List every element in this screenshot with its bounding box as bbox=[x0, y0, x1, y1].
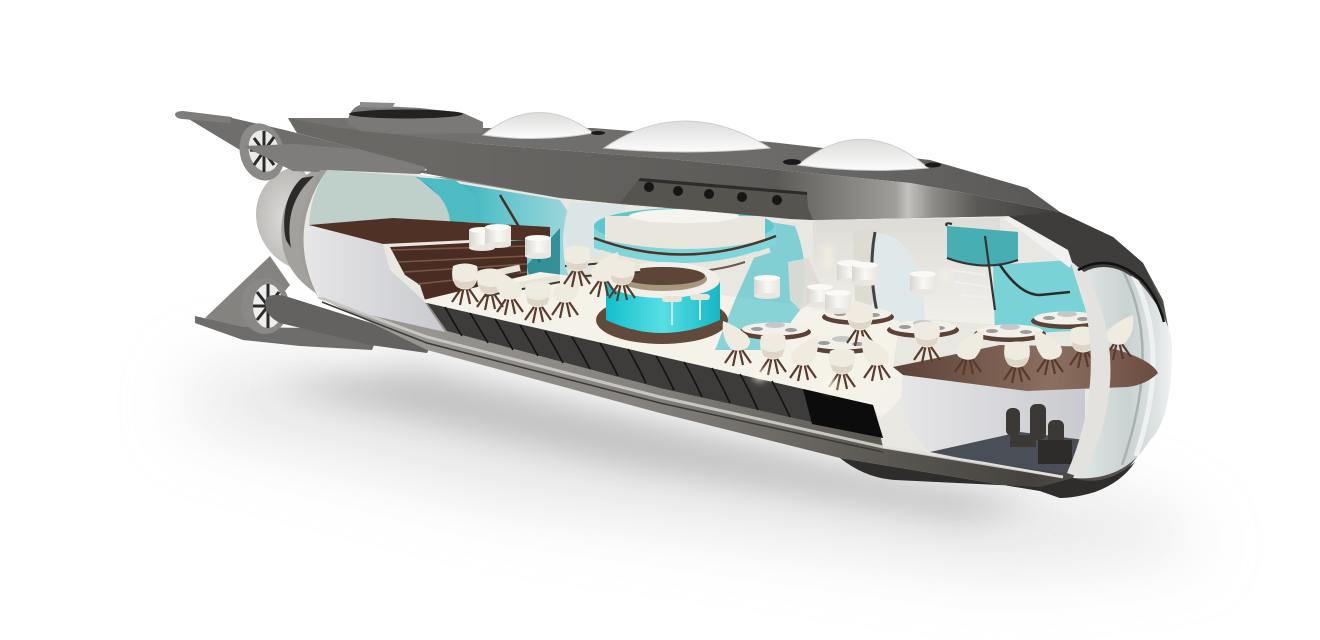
front dining tables bbox=[739, 307, 1103, 354]
cockpit seats bbox=[1006, 404, 1072, 464]
rear brown platform bbox=[309, 218, 550, 244]
top deck bbox=[288, 118, 1060, 212]
front dining chairs bbox=[723, 304, 1133, 390]
mid round window bbox=[563, 202, 625, 285]
front spiral staircase bbox=[946, 223, 1070, 310]
wall lights bbox=[754, 246, 949, 391]
teal wall behind bar bbox=[715, 222, 805, 350]
bar stools bbox=[662, 294, 710, 325]
hull lower rail bbox=[318, 297, 1063, 477]
white bulkhead arc bbox=[1067, 262, 1111, 478]
upper rear fin and propeller bbox=[175, 111, 427, 186]
nose shell bbox=[1005, 212, 1165, 322]
front section wall and arch window bbox=[813, 218, 1000, 325]
front skylight structure bbox=[1003, 217, 1076, 268]
domes bbox=[483, 112, 941, 170]
interior back wall bbox=[303, 170, 1096, 473]
rear hull ball bbox=[256, 166, 330, 298]
lower rear fin and propeller bbox=[195, 256, 432, 353]
pendant lamps bbox=[469, 224, 936, 314]
dining floor bbox=[423, 272, 900, 405]
rear staircase bbox=[390, 240, 527, 300]
rear dining tables and chairs bbox=[452, 246, 640, 323]
rear teal staircase and wall bbox=[415, 177, 579, 284]
central bar counter bbox=[596, 262, 728, 344]
rear white bulkhead bbox=[306, 226, 445, 332]
stairs to lower deck bbox=[873, 367, 903, 418]
lower cockpit wall bbox=[902, 376, 1085, 470]
underfloor windows bbox=[427, 303, 883, 438]
cockpit floor bbox=[930, 432, 1085, 474]
rear glass wall bbox=[309, 170, 470, 226]
lower deck rail bbox=[883, 447, 1063, 477]
front upper wood floor bbox=[893, 345, 1158, 391]
deck fascia bbox=[288, 118, 1060, 220]
front teal wall bbox=[993, 260, 1092, 335]
nose underside bbox=[840, 458, 1135, 498]
ground shadow bbox=[180, 355, 1210, 570]
hull body bbox=[299, 170, 1172, 498]
mid staircase bbox=[788, 258, 825, 310]
side pontoon with portholes bbox=[620, 178, 813, 220]
inner glass arcs bbox=[1118, 262, 1153, 465]
conning tower hatch bbox=[347, 102, 483, 134]
nose glass bubble bbox=[1073, 265, 1172, 478]
central bar upper balcony bbox=[594, 208, 776, 272]
